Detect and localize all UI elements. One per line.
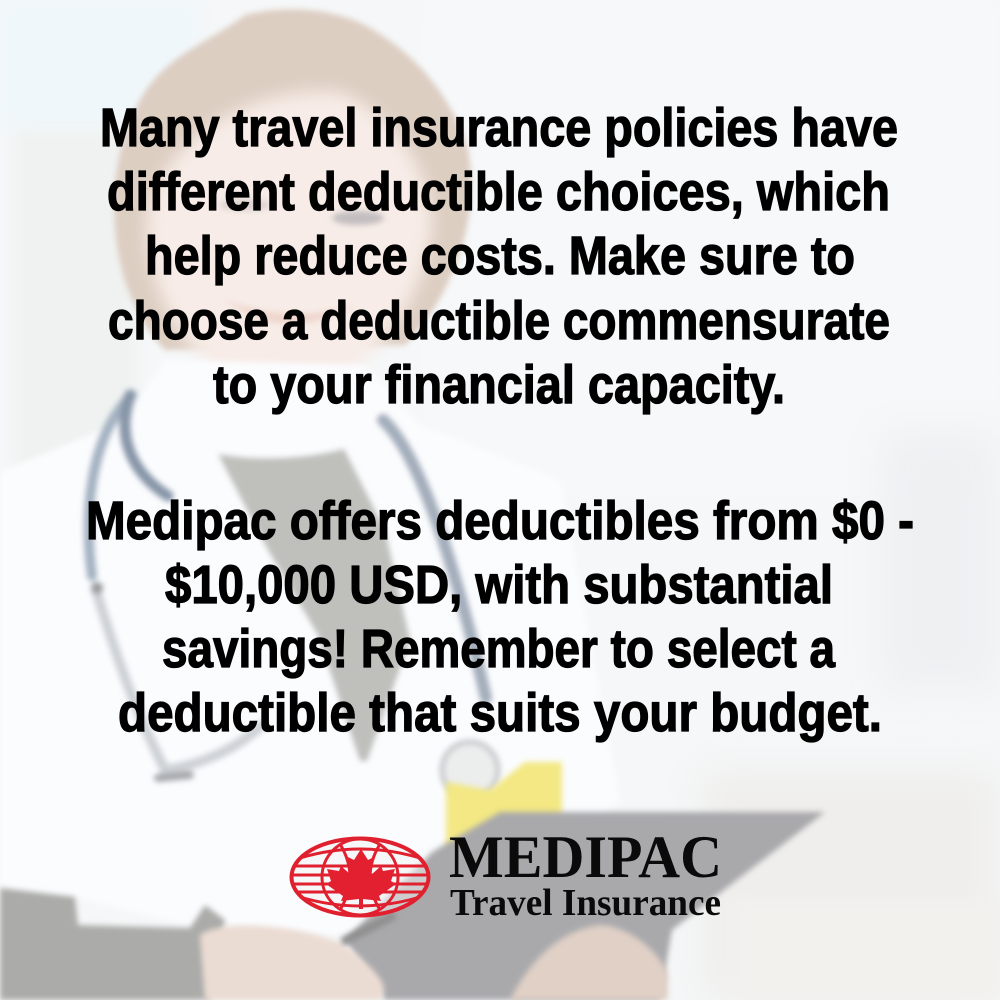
wordmark: Travel Insurance: Travel Insurance bbox=[450, 882, 721, 924]
text block: deductible choices bbox=[100, 98, 898, 415]
logo: Medipac bbox=[292, 824, 722, 924]
text block: deductible choices: choose a deductible commensurate bbox=[108, 291, 890, 351]
text block: Medipac offer: savings! Remember to select a bbox=[162, 619, 836, 679]
clipboard bbox=[345, 812, 825, 1000]
text block: deductible choices: Many travel insurance policies have bbox=[100, 98, 898, 158]
hair bbox=[114, 9, 471, 350]
text block: Medipac offer bbox=[86, 491, 914, 743]
text block: Medipac offer: Medipac offers deductibles from $0 - bbox=[86, 491, 914, 551]
grey shirt bbox=[218, 449, 410, 761]
hands bbox=[200, 925, 668, 1000]
wordmark: MEDIPAC: MEDIPAC bbox=[449, 824, 722, 890]
text block: Medipac offer: $10,000 USD, with substantial bbox=[165, 555, 833, 615]
sleeve bbox=[0, 888, 225, 1000]
lab coat bbox=[0, 360, 620, 935]
text block: deductible choices: different deductible choices, which bbox=[107, 162, 890, 222]
text block: Medipac offer: deductible that suits your budget. bbox=[118, 683, 882, 743]
text block: deductible choices: help reduce costs. Make sure to bbox=[145, 226, 855, 286]
face bbox=[147, 91, 432, 390]
pen bbox=[342, 915, 395, 942]
yellow note bbox=[446, 762, 562, 862]
stethoscope tubing bbox=[89, 395, 498, 798]
icon: red globe with maple leaf bbox=[292, 838, 428, 916]
text block: deductible choices: to your financial capacity. bbox=[213, 355, 785, 415]
eyes and mouth bbox=[219, 199, 384, 324]
